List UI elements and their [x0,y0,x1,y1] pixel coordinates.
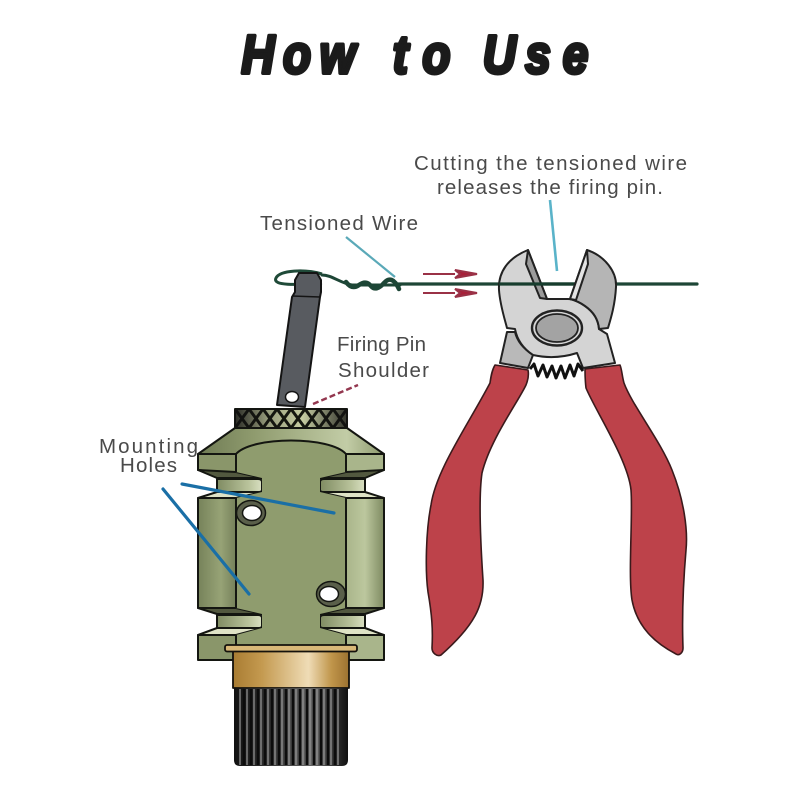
label: tensioned wire: Tensioned Wire [260,212,418,235]
lower arm left [500,332,533,368]
label: mounting holes: Holes [120,454,177,477]
pull arrow lower [423,289,477,297]
wire loop behind firing pin [276,271,322,284]
centre panel [236,440,346,650]
right jaw [570,250,616,329]
tensioned wire with twist [322,275,697,289]
necks [217,479,262,492]
side blocks [198,498,236,608]
chamfered top [198,428,384,454]
ribbed knob [234,688,348,766]
label: mounting holes: Mounting [99,435,198,458]
pointer line: firing pin shoulder [313,385,358,404]
label: firing pin shoulder: Firing Pin [337,333,426,356]
knurled shoulder [235,409,347,428]
firing pin [277,273,321,407]
title: How to Use [241,25,588,85]
fuze body [198,409,384,660]
pointer lines: mounting holes [163,484,334,594]
label: firing pin shoulder [337,333,429,382]
handle right [585,365,686,655]
label: mounting holes [99,435,198,477]
wire over left blade [499,282,580,286]
pointer line: cut point [550,200,557,271]
mounting hole upper [236,500,266,526]
label: cutting the tensioned wire [414,152,687,199]
spring [530,364,583,378]
mounting hole lower [316,582,346,606]
lower side blocks [198,635,236,660]
brass collar [225,645,357,688]
pull arrow upper [423,270,477,278]
pointer line: tensioned wire [346,237,395,277]
left blade strip [526,250,547,299]
pliers [426,250,686,656]
left jaw, head ring and right arm [499,250,615,368]
label: firing pin shoulder: Shoulder [338,359,429,382]
label: cutting the tensioned wire: releases the firing pin. [437,176,663,199]
upper side blocks [198,454,236,472]
label: cutting the tensioned wire: Cutting the tensioned wire [414,152,687,175]
right blade strip [570,250,588,300]
pivot [532,310,582,346]
handle left [426,365,528,656]
